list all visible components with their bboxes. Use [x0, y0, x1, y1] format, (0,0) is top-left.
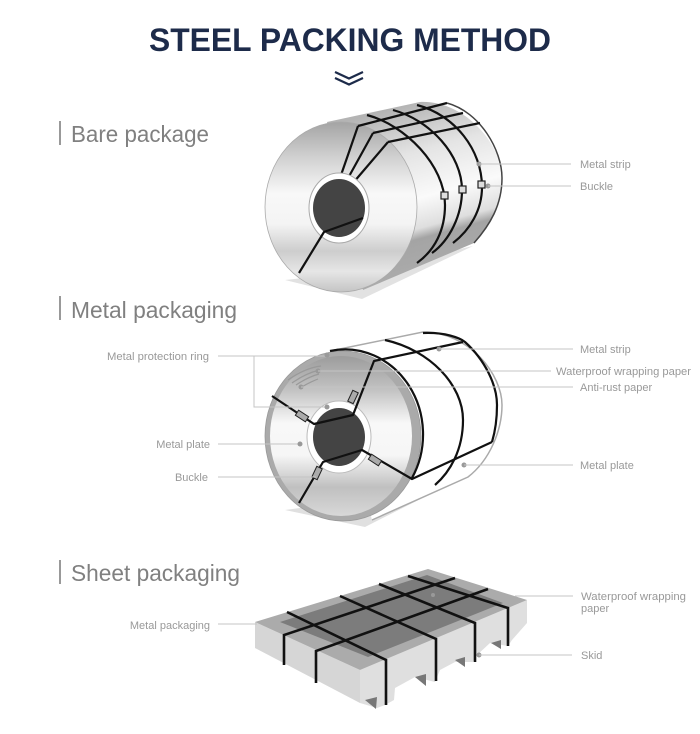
- label: waterproof wrapping paper: [431, 591, 686, 615]
- label: anti-rust paper: Anti-rust paper: [580, 382, 652, 394]
- label: skid: Skid: [581, 650, 602, 662]
- label: buckle: Buckle: [580, 181, 613, 193]
- label: waterproof wrapping paper: Waterproof wrapping paper: [556, 366, 691, 378]
- heading: sheet packaging: Sheet packaging: [71, 560, 240, 586]
- label: metal strip: Metal strip: [580, 159, 631, 171]
- label: buckle: [486, 181, 613, 193]
- title: STEEL PACKING METHOD: [149, 22, 551, 58]
- label: anti-rust paper: [298, 382, 652, 394]
- label: waterproof wrapping paper: Waterproof wrapping: [581, 591, 686, 603]
- label: metal plate right: Metal plate: [580, 460, 634, 472]
- icon: double chevron: [335, 72, 363, 84]
- label: skid: [476, 650, 602, 662]
- label: metal plate right: [462, 460, 634, 472]
- coil illustration: bare: [265, 102, 502, 299]
- heading: bare package: Bare package: [71, 121, 209, 147]
- label: metal packaging: Metal packaging: [130, 620, 210, 632]
- coil illustration: metal: [265, 332, 502, 527]
- label: metal plate left: [156, 439, 302, 451]
- label: metal protection ring: Metal protection ring: [107, 351, 209, 363]
- label: metal strip right: [436, 344, 631, 356]
- panel: sheet packaging: [59, 560, 686, 709]
- label: metal strip: [476, 159, 631, 171]
- label: metal protection ring: [107, 351, 330, 410]
- label: waterproof wrapping paper: paper: [581, 603, 609, 615]
- panel: bare package: [59, 102, 631, 299]
- heading: metal packaging: Metal packaging: [71, 297, 237, 323]
- label: metal plate left: Metal plate: [156, 439, 210, 451]
- panel: metal packaging: [59, 296, 691, 527]
- label: metal strip right: Metal strip: [580, 344, 631, 356]
- label: metal packaging: [130, 620, 257, 632]
- label: waterproof wrapping paper: [316, 366, 691, 378]
- sheet stack illustration: [255, 569, 527, 709]
- label: buckle left: Buckle: [175, 472, 208, 484]
